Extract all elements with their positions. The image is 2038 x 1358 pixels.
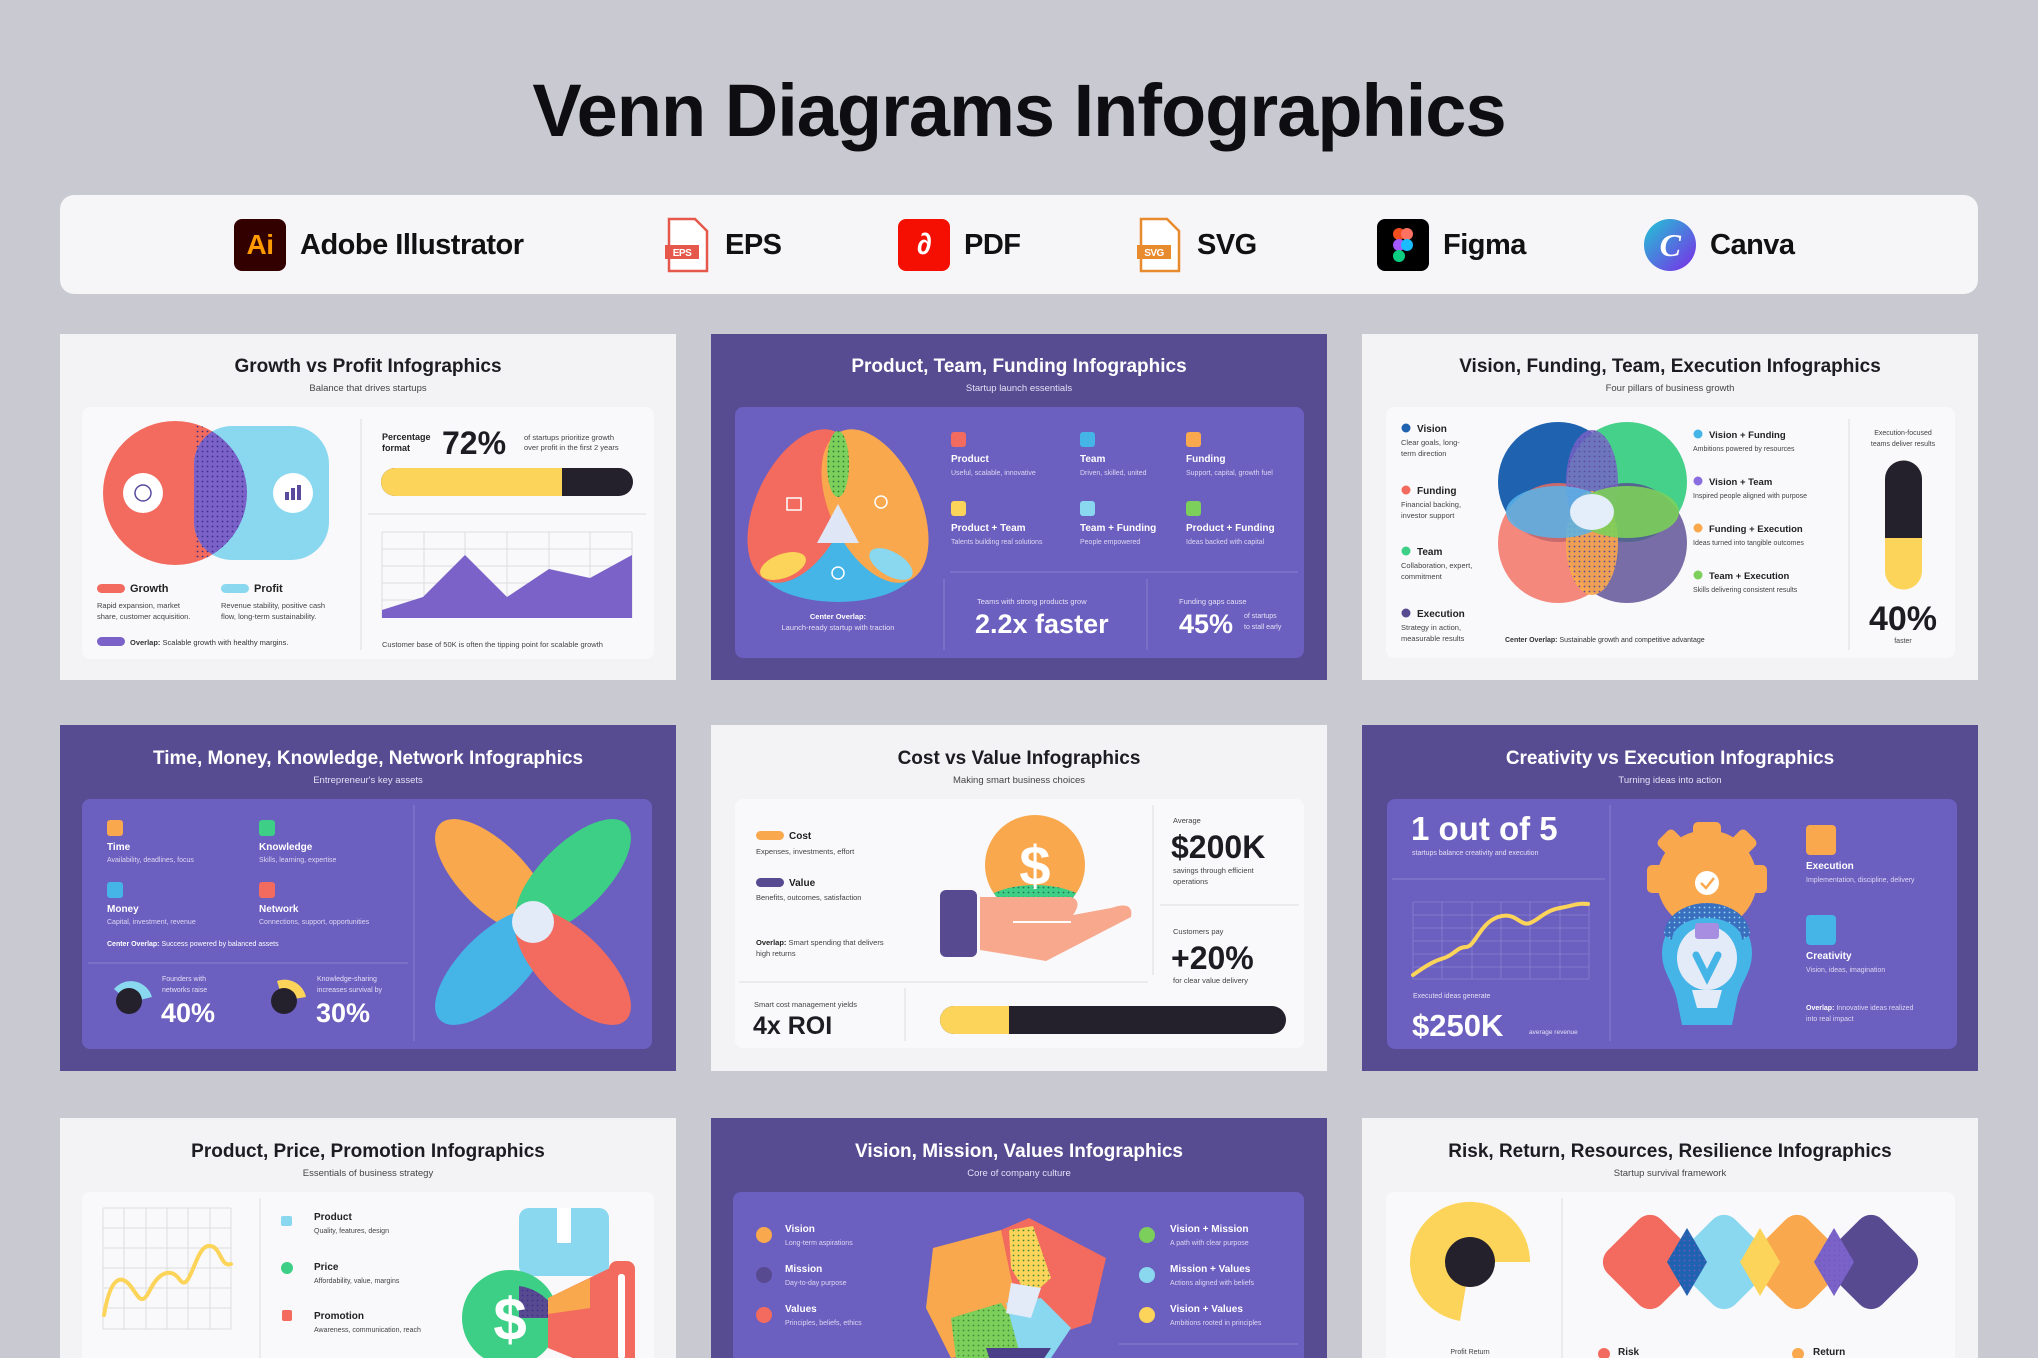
stat: 40% faster: 40% <box>1869 600 1937 638</box>
legend: Overlap: Innovative ideas realized <box>1806 1005 1914 1012</box>
legend: into real impact <box>1806 1016 1854 1023</box>
format: Adobe Illustrator <box>234 219 524 271</box>
area chart <box>382 532 632 618</box>
right legend: Funding + Execution <box>1709 524 1803 535</box>
legend: Profit <box>254 583 283 595</box>
right legend <box>1693 430 1807 594</box>
illustration: coin in hand <box>940 815 1131 961</box>
heading: Vision, Mission, Values Infographics <box>855 1141 1183 1162</box>
legend: Cost <box>789 831 812 842</box>
inner card <box>1386 1192 1955 1358</box>
stat: $250K: Executed ideas generate <box>1413 993 1491 1000</box>
legend: Implementation, discipline, delivery <box>1806 877 1915 884</box>
legend: Network <box>259 904 299 915</box>
legend grid <box>951 432 1275 546</box>
legend: Time <box>107 842 131 853</box>
legend: Revenue stability, positive cash <box>221 601 325 610</box>
heading <box>1448 1141 1892 1179</box>
center overlap caption: Launch-ready startup with traction <box>782 623 894 632</box>
format: Figma <box>1377 219 1527 271</box>
right legend: Inspired people aligned with purpose <box>1693 493 1807 500</box>
left legend: Financial backing, <box>1401 500 1461 509</box>
heading: Four pillars of business growth <box>1606 383 1734 394</box>
legend <box>97 583 325 647</box>
format: SVG <box>1137 218 1257 272</box>
right legend: Ambitions rooted in principles <box>1170 1320 1262 1327</box>
stat: +20% <box>1171 927 1254 985</box>
format: EPS: EPS <box>673 248 692 259</box>
legend: Benefits, outcomes, satisfaction <box>756 893 861 902</box>
legend grid: Driven, skilled, united <box>1080 470 1147 477</box>
line chart <box>103 1208 231 1329</box>
legend: Creativity <box>1806 951 1852 962</box>
format: Figma: Figma <box>1443 228 1526 260</box>
stat: 40% faster <box>1869 430 1937 645</box>
stat: 40%: networks raise <box>162 987 207 994</box>
panel: Vision, Funding, Team, Execution <box>1362 334 1978 680</box>
heading: Growth vs Profit Infographics <box>234 356 502 377</box>
panel: Product, Team, Funding <box>711 334 1327 680</box>
legend grid: Support, capital, growth fuel <box>1186 470 1273 477</box>
left legend: Values <box>785 1304 817 1315</box>
heading <box>153 748 583 786</box>
title: Venn Diagrams Infographics <box>532 69 1506 152</box>
stat: 30% <box>271 976 382 1028</box>
legend: Connections, support, opportunities <box>259 919 370 926</box>
heading: Balance that drives startups <box>309 383 427 394</box>
left legend: Collaboration, expert, <box>1401 561 1472 570</box>
right legend: Ambitions powered by resources <box>1693 446 1795 453</box>
heading: Turning ideas into action <box>1618 775 1722 786</box>
center overlap caption: Center Overlap: <box>810 612 866 621</box>
icon: growth <box>123 473 163 513</box>
inner card <box>82 799 652 1049</box>
center overlap caption <box>782 612 894 632</box>
left legend: Day-to-day purpose <box>785 1280 847 1287</box>
inner card <box>1387 799 1957 1049</box>
panel: Vision, Mission, Values <box>711 1118 1327 1358</box>
heading: Product, Price, Promotion Infographics <box>191 1141 545 1162</box>
pie chart <box>1410 1202 1530 1356</box>
diamonds venn <box>1596 1208 1925 1316</box>
legend: Expenses, investments, effort <box>756 847 855 856</box>
heading: Making smart business choices <box>953 775 1085 786</box>
illustration: coin in hand: $ <box>1019 834 1051 897</box>
stat: 72%: of startups prioritize growth <box>524 433 614 442</box>
legend <box>1598 1347 1845 1358</box>
format: SVG: SVG <box>1144 248 1165 259</box>
legend: share, customer acquisition. <box>97 612 190 621</box>
illustration: product price promotion <box>462 1208 635 1358</box>
heading: Essentials of business strategy <box>303 1168 433 1179</box>
legend grid: Product + Funding <box>1186 523 1275 534</box>
legend: Value <box>789 878 816 889</box>
left legend: Execution <box>1417 609 1465 620</box>
heading <box>234 356 502 394</box>
right legend: Vision + Values <box>1170 1304 1243 1315</box>
left legend: Funding <box>1417 486 1456 497</box>
heading: Entrepreneur's key assets <box>313 775 423 786</box>
inner card <box>733 1192 1304 1358</box>
legend: Overlap: Scalable growth with healthy margins. <box>130 638 288 647</box>
stat: 30%: increases survival by <box>317 987 382 994</box>
panel: Creativity vs Execution <box>1362 725 1978 1071</box>
heading: Core of company culture <box>967 1168 1071 1179</box>
left legend: term direction <box>1401 449 1446 458</box>
inner card <box>82 1192 654 1358</box>
list: Quality, features, design <box>314 1228 389 1235</box>
right legend: Ideas turned into tangible outcomes <box>1693 540 1804 547</box>
left legend: Mission <box>785 1264 822 1275</box>
heading: Startup survival framework <box>1614 1168 1726 1179</box>
format: EPS: EPS <box>725 228 782 260</box>
illustration: gear and bulb <box>1647 822 1767 1025</box>
stat: 40% faster: faster <box>1894 638 1912 645</box>
inner card <box>1386 407 1955 658</box>
list: Promotion <box>314 1311 364 1322</box>
legend: Vision, ideas, imagination <box>1806 967 1885 974</box>
format: EPS <box>665 218 782 272</box>
pie chart: Profit Return <box>1450 1349 1490 1356</box>
left legend <box>756 1224 862 1327</box>
legend grid: Product <box>951 454 989 465</box>
stat: $200K <box>1171 816 1265 886</box>
format: Canva: Canva <box>1710 228 1795 260</box>
left legend: Strategy in action, <box>1401 623 1461 632</box>
left legend: Team <box>1417 547 1442 558</box>
stat: 72%: over profit in the first 2 years <box>524 443 619 452</box>
legend: Rapid expansion, market <box>97 601 181 610</box>
format: PDF: PDF <box>964 228 1020 260</box>
stat: 4x ROI: 4x ROI <box>753 1012 832 1040</box>
list <box>281 1212 421 1334</box>
legend: Center Overlap: Success powered by balanced assets <box>107 941 279 948</box>
left legend: investor support <box>1401 511 1455 520</box>
legend grid: Talents building real solutions <box>951 539 1043 546</box>
inner card <box>735 799 1304 1048</box>
list: Affordability, value, margins <box>314 1278 400 1285</box>
hexagon venn <box>926 1218 1106 1358</box>
progress bar <box>940 1006 1286 1034</box>
legend <box>756 831 884 958</box>
legend <box>107 820 370 948</box>
right legend <box>1139 1224 1262 1327</box>
line chart <box>1413 902 1589 979</box>
legend: Capital, investment, revenue <box>107 919 196 926</box>
right legend: A path with clear purpose <box>1170 1240 1249 1247</box>
stat: 72% <box>381 425 633 496</box>
icon: hands <box>875 496 887 508</box>
legend: Availability, deadlines, focus <box>107 857 194 864</box>
stat: +20%: Customers pay <box>1173 927 1224 936</box>
right legend: Vision + Mission <box>1170 1224 1248 1235</box>
heading: Risk, Return, Resources, Resilience Infographics <box>1448 1141 1892 1162</box>
panel: Growth vs Profit <box>60 334 676 680</box>
format: Canva: C <box>1660 227 1682 263</box>
flower venn <box>417 801 649 1043</box>
format: Canva <box>1644 219 1796 271</box>
left legend: Long-term aspirations <box>785 1240 853 1247</box>
legend grid: Funding <box>1186 454 1225 465</box>
stat: 72%: format <box>382 443 410 453</box>
format: Adobe Illustrator: Adobe Illustrator <box>300 228 524 260</box>
inner card <box>735 407 1304 658</box>
stat: 4x ROI <box>753 1000 857 1040</box>
stat: 40% faster: teams deliver results <box>1871 441 1936 448</box>
right legend: Team + Execution <box>1709 571 1790 582</box>
legend: Execution <box>1806 861 1854 872</box>
four-circle venn <box>1498 422 1687 603</box>
heading: Creativity vs Execution Infographics <box>1506 748 1834 769</box>
panel: Time, Money, Knowledge, Network <box>60 725 676 1071</box>
stat: 40% <box>114 976 215 1028</box>
stat: 45%: Funding gaps cause <box>1179 597 1247 606</box>
stat: $250K: $250K <box>1412 1008 1504 1043</box>
legend: high returns <box>756 949 796 958</box>
legend grid: Product + Team <box>951 523 1026 534</box>
list: Awareness, communication, reach <box>314 1327 421 1334</box>
stat: 4x ROI: Smart cost management yields <box>754 1000 857 1009</box>
format bar <box>60 195 1978 294</box>
stat: 40%: Founders with <box>162 976 206 983</box>
heading <box>1459 356 1881 394</box>
left legend: commitment <box>1401 572 1443 581</box>
legend: Growth <box>130 583 169 595</box>
stat: 2.2x faster: Teams with strong products grow <box>977 597 1087 606</box>
stat: 45% <box>1179 597 1282 639</box>
stat: 1 out of 5: startups balance creativity and execution <box>1412 850 1539 857</box>
panel: Product, Price, Promotion <box>60 1118 676 1358</box>
legend <box>1806 825 1915 1023</box>
heading <box>851 356 1187 394</box>
legend: Knowledge <box>259 842 313 853</box>
legend: Overlap: Smart spending that delivers <box>756 938 884 947</box>
stat: 40%: 40% <box>161 998 215 1028</box>
illustration: product price promotion: $ <box>493 1286 527 1353</box>
heading: Startup launch essentials <box>966 383 1072 394</box>
icon: team <box>832 567 844 579</box>
list: Price <box>314 1262 339 1273</box>
icon: gift <box>787 498 801 510</box>
left legend: Clear goals, long- <box>1401 438 1460 447</box>
legend grid: Team + Funding <box>1080 523 1156 534</box>
legend: Risk <box>1618 1347 1640 1358</box>
format: Adobe Illustrator: Ai <box>246 229 274 260</box>
legend: Return <box>1813 1347 1845 1358</box>
legend grid: Ideas backed with capital <box>1186 539 1265 546</box>
stat: 45%: of startups <box>1244 613 1277 620</box>
legend grid: People empowered <box>1080 539 1140 546</box>
stat: 30%: 30% <box>316 998 370 1028</box>
stat: 30%: Knowledge-sharing <box>317 976 377 983</box>
heading: Product, Team, Funding Infographics <box>851 356 1187 377</box>
right legend: Vision + Team <box>1709 477 1772 488</box>
format: SVG: SVG <box>1197 228 1257 260</box>
heading <box>855 1141 1183 1179</box>
format: PDF: ∂ <box>917 228 931 261</box>
stat: $200K: $200K <box>1171 829 1265 865</box>
left legend <box>1401 424 1472 643</box>
legend grid: Team <box>1080 454 1105 465</box>
left legend: measurable results <box>1401 634 1465 643</box>
heading: Time, Money, Knowledge, Network Infographics <box>153 748 583 769</box>
stat: +20%: +20% <box>1171 940 1254 976</box>
stat: $200K: operations <box>1173 877 1208 886</box>
right legend: Vision + Funding <box>1709 430 1786 441</box>
stat: 72%: 72% <box>442 425 506 461</box>
left legend: Vision <box>785 1224 815 1235</box>
stat: 40% faster: Execution-focused <box>1874 430 1932 437</box>
stat: +20%: for clear value delivery <box>1173 976 1248 985</box>
right legend: Mission + Values <box>1170 1264 1251 1275</box>
stat: $200K: savings through efficient <box>1173 866 1255 875</box>
legend: flow, long-term sustainability. <box>221 612 316 621</box>
heading: Vision, Funding, Team, Execution Infographics <box>1459 356 1881 377</box>
stat: 2.2x faster: 2.2x faster <box>975 609 1109 639</box>
right legend: Skills delivering consistent results <box>1693 587 1798 594</box>
stat: $200K: Average <box>1173 816 1201 825</box>
stat: 45%: to stall early <box>1244 624 1282 631</box>
inner card <box>82 407 654 659</box>
panel: Risk, Return, Resources, Resilience <box>1362 1118 1978 1358</box>
heading: Cost vs Value Infographics <box>898 748 1140 769</box>
legend grid: Useful, scalable, innovative <box>951 470 1036 477</box>
heading <box>898 748 1140 786</box>
panel: Cost vs Value <box>711 725 1327 1071</box>
format: PDF <box>898 219 1020 271</box>
venn diagram <box>103 421 329 565</box>
icon: profit <box>273 473 313 513</box>
heading <box>1506 748 1834 786</box>
heading <box>191 1141 545 1179</box>
center overlap caption: Center Overlap: Sustainable growth and competitive advantage <box>1505 637 1705 644</box>
right legend: Actions aligned with beliefs <box>1170 1280 1255 1287</box>
stat: 45%: 45% <box>1179 609 1233 639</box>
venn triangle <box>726 413 950 602</box>
left legend: Vision <box>1417 424 1447 435</box>
legend: Money <box>107 904 139 915</box>
caption: Customer base of 50K is often the tipping point for scalable growth <box>382 640 603 649</box>
stat: $250K: average revenue <box>1529 1029 1578 1036</box>
stat: 72%: Percentage <box>382 432 431 442</box>
list: Product <box>314 1212 352 1223</box>
stat: $250K <box>1412 993 1578 1043</box>
stat: 1 out of 5: 1 out of 5 <box>1411 810 1558 847</box>
left legend: Principles, beliefs, ethics <box>785 1320 862 1327</box>
legend: Skills, learning, expertise <box>259 857 337 864</box>
